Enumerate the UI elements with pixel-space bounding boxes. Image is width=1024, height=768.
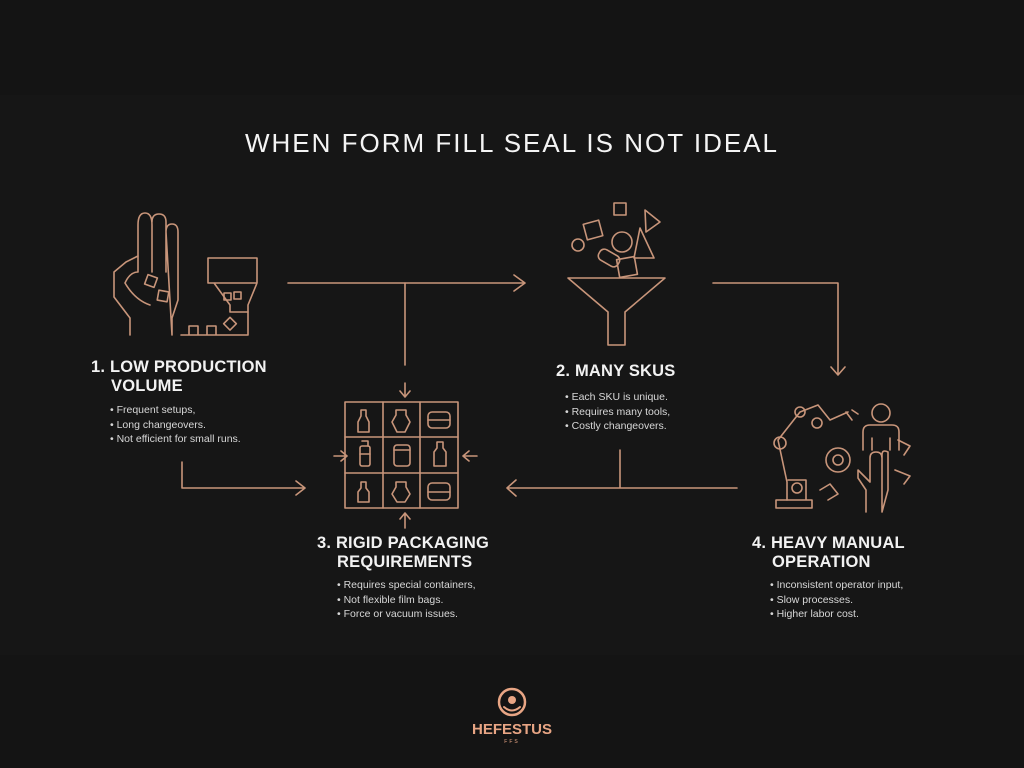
title: WHEN FORM FILL SEAL IS NOT IDEAL <box>245 128 779 158</box>
heading 1: 1. LOW PRODUCTION <box>91 358 267 376</box>
bullets 3: • Requires special containers, <box>337 579 476 591</box>
background panel <box>0 95 1024 655</box>
bullets 3: • Force or vacuum issues. <box>337 608 458 620</box>
icon: funnel with shapes <box>568 203 665 345</box>
bullets 2 <box>565 391 670 432</box>
bullets 1: • Not efficient for small runs. <box>110 433 241 445</box>
heading 3 <box>317 534 489 571</box>
bullets 1: • Long changeovers. <box>110 418 206 430</box>
bullets 3: • Not flexible film bags. <box>337 594 443 606</box>
arrow: 1 to 2 <box>288 275 525 397</box>
heading 1: VOLUME <box>111 377 183 395</box>
heading 4: 4. HEAVY MANUAL <box>752 534 905 552</box>
bullets 4: • Higher labor cost. <box>770 608 859 620</box>
bullets 2: • Requires many tools, <box>565 406 670 418</box>
bullets 4 <box>770 579 903 620</box>
bullets 1: • Frequent setups, <box>110 404 195 416</box>
arrow: 2 to 4 <box>713 283 845 375</box>
bullets 2: • Costly changeovers. <box>565 420 667 432</box>
bullets 3 <box>337 579 476 620</box>
bullets 2: • Each SKU is unique. <box>565 391 668 403</box>
arrow: 4 to 3 <box>507 450 737 496</box>
arrow: 1 to 3 <box>182 462 305 495</box>
icon: hand with blocks <box>114 213 257 335</box>
heading 3: 3. RIGID PACKAGING <box>317 534 489 552</box>
heading 3: REQUIREMENTS <box>337 553 472 571</box>
heading 1 <box>91 358 267 395</box>
logo text: HEFESTUS <box>472 721 552 738</box>
logo text: FFS <box>504 739 520 745</box>
bullets 1 <box>110 404 241 445</box>
icon: packaging grid <box>334 402 477 528</box>
heading 4 <box>752 534 905 571</box>
bullets 4: • Slow processes. <box>770 594 853 606</box>
heading 2: 2. MANY SKUS <box>556 362 675 380</box>
icon: robot arm, worker, tools <box>774 404 910 512</box>
heading 4: OPERATION <box>772 553 871 571</box>
logo icon <box>499 689 525 715</box>
bullets 4: • Inconsistent operator input, <box>770 579 903 591</box>
